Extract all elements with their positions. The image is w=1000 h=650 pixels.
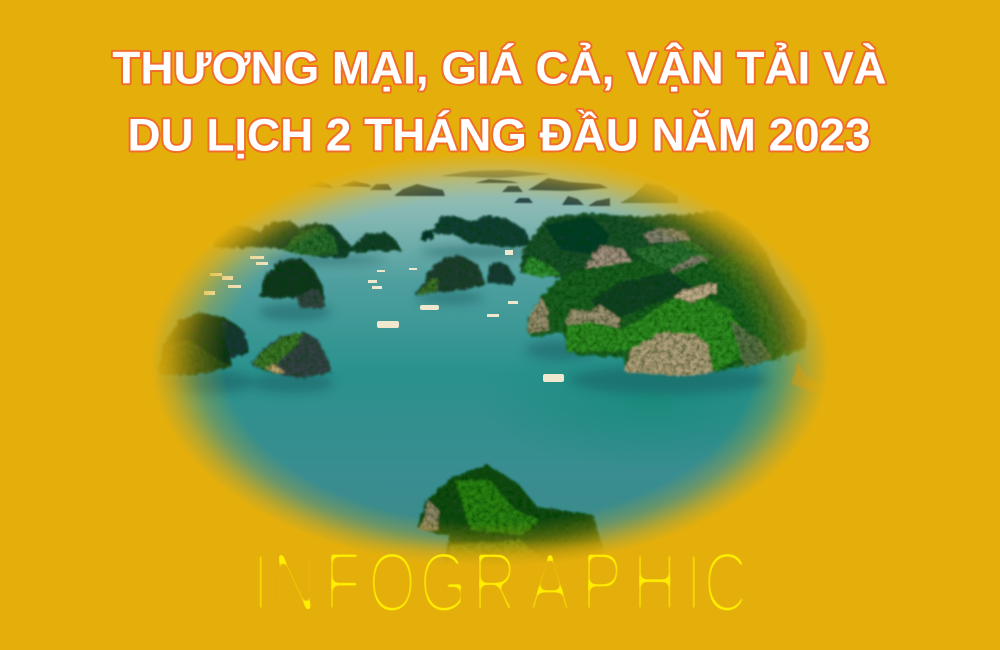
title line 1: THƯƠNG MẠI, GIÁ CẢ, VẬN TẢI VÀ (112, 42, 887, 94)
far islands on the horizon (305, 170, 610, 206)
island big left (158, 313, 249, 375)
island left centre (259, 258, 325, 308)
INFOGRAPHIC label: INFOGRAPHIC (252, 534, 748, 630)
far-right rock (791, 362, 822, 392)
photo: Ha Long Bay aerial vignette (130, 140, 850, 590)
massive karst upper (520, 210, 780, 320)
island pyramid (252, 332, 331, 378)
massive karst lower (528, 253, 806, 376)
title line 2: DU LỊCH 2 THÁNG ĐẦU NĂM 2023 (127, 108, 871, 160)
island pair upper middle (420, 216, 531, 248)
lower fade (140, 540, 840, 578)
small island centre (487, 261, 516, 285)
island chain left (212, 221, 401, 258)
bottom foreground island (417, 465, 606, 578)
sea (140, 150, 840, 578)
elliptical vignette (130, 140, 850, 590)
boats (204, 250, 564, 382)
green sea tint (470, 320, 830, 480)
island centre (416, 255, 486, 295)
far right island (620, 183, 678, 203)
title (112, 42, 887, 160)
front limestone cliff (625, 332, 712, 376)
island reflections (155, 246, 770, 394)
